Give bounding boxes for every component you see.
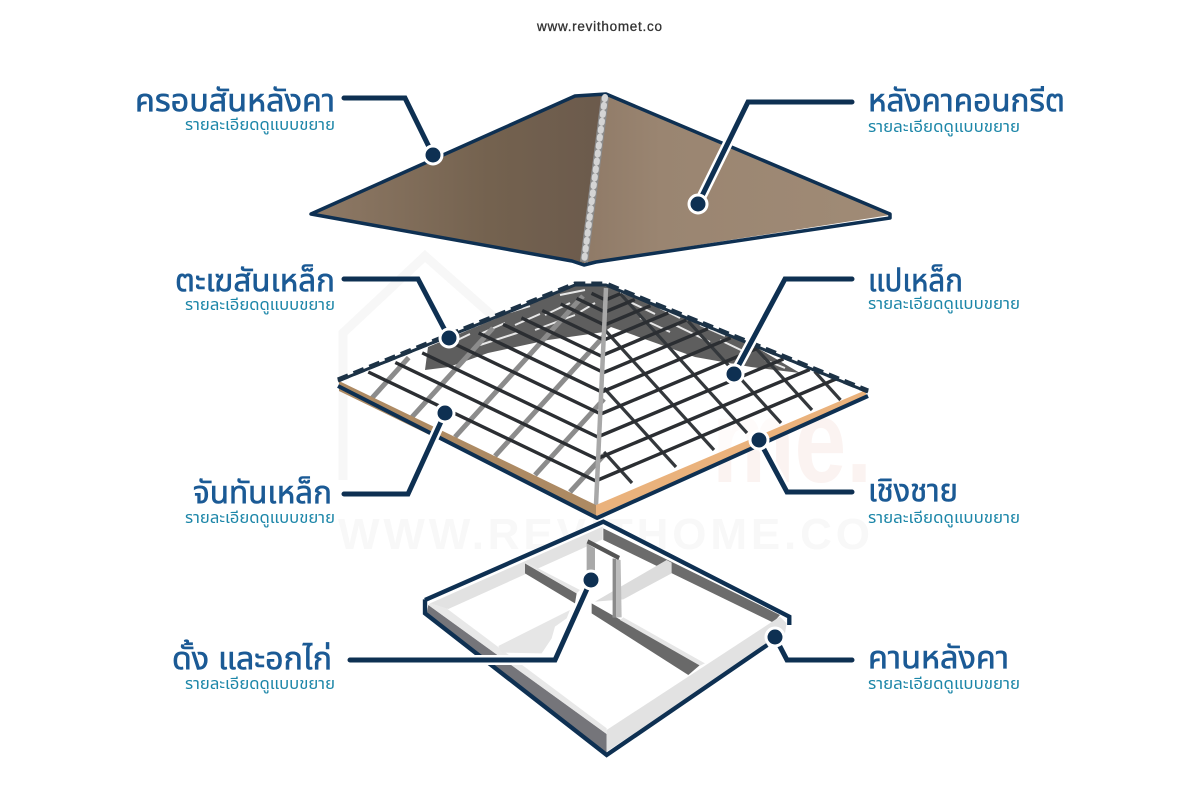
fascia right (596, 390, 866, 516)
left beam top face (428, 603, 607, 734)
callout: steel hip (175, 263, 458, 347)
purlins, right slope (598, 294, 836, 480)
ridge cap (584, 97, 605, 262)
callout: steel hip: ตะเฆสันเหล็ก (175, 263, 335, 298)
callout: concrete roof: รายละเอียดดูแบบขยาย (868, 119, 1020, 136)
long dark beam (592, 603, 700, 675)
note: รายละเอียดดูแบบขยาย (185, 117, 335, 134)
callout: king post and ridge beam (172, 571, 600, 693)
illustration: concrete roof shell (311, 94, 890, 265)
callout: steel rafter: จันทันเหล็ก (193, 475, 332, 510)
callout: fascia (750, 431, 1020, 527)
back-right inner face (603, 528, 780, 623)
back-left beam (430, 527, 603, 609)
callout: steel rafter: รายละเอียดดูแบบขยาย (185, 510, 335, 527)
callout: king post and ridge beam: ดั้ง และอกไก่ (172, 639, 332, 676)
callout: roof beam: คานหลังคา (868, 640, 1009, 675)
purlins, left slope (368, 293, 606, 482)
translucent roof backing (339, 285, 866, 512)
tiled eave edges (338, 285, 868, 392)
callout: concrete roof (689, 83, 1065, 213)
callout: steel purlin (725, 263, 1020, 383)
callout: steel purlin: รายละเอียดดูแบบขยาย (868, 296, 1020, 313)
white backing (425, 522, 790, 755)
leader line (405, 98, 433, 155)
callout: steel rafter (185, 404, 454, 527)
callout: ridge cap (135, 83, 442, 164)
watermark: me. (712, 374, 872, 508)
callout: fascia: รายละเอียดดูแบบขยาย (868, 510, 1020, 527)
rafters, left slope (372, 296, 604, 492)
outer side face (427, 605, 607, 753)
illustration: steel roof frame (338, 284, 868, 518)
back slope light slits (445, 290, 785, 368)
short dark beam (525, 563, 577, 603)
back slope shadow (425, 285, 800, 373)
callout: king post and ridge beam: รายละเอียดดูแบบขยาย (185, 676, 335, 693)
callout: roof beam: รายละเอียดดูแบบขยาย (868, 676, 1020, 693)
watermark (338, 256, 872, 559)
rafters, right slope (604, 294, 840, 483)
website url: www.revithomet.co (536, 19, 662, 34)
front-right beam (607, 617, 787, 752)
callout: fascia: เชิงชาย (868, 473, 958, 508)
cross beam right (595, 560, 672, 602)
cross beam left (498, 610, 570, 653)
beam outlines (425, 522, 789, 625)
illustration: roof beams (425, 522, 790, 755)
watermark: WWW.REVITHOME.CO (338, 510, 870, 559)
fascia left (339, 381, 596, 516)
callout: steel purlin: แปเหล็ก (868, 263, 963, 298)
callout: steel hip: รายละเอียดดูแบบขยาย (185, 297, 335, 314)
callout: roof beam (766, 628, 1020, 693)
frame outline (338, 386, 868, 518)
hip rafter (596, 288, 606, 505)
label: ครอบสันหลังคา (135, 83, 335, 118)
king post (587, 539, 622, 617)
callout: concrete roof: หลังคาคอนกรีต (868, 83, 1065, 118)
